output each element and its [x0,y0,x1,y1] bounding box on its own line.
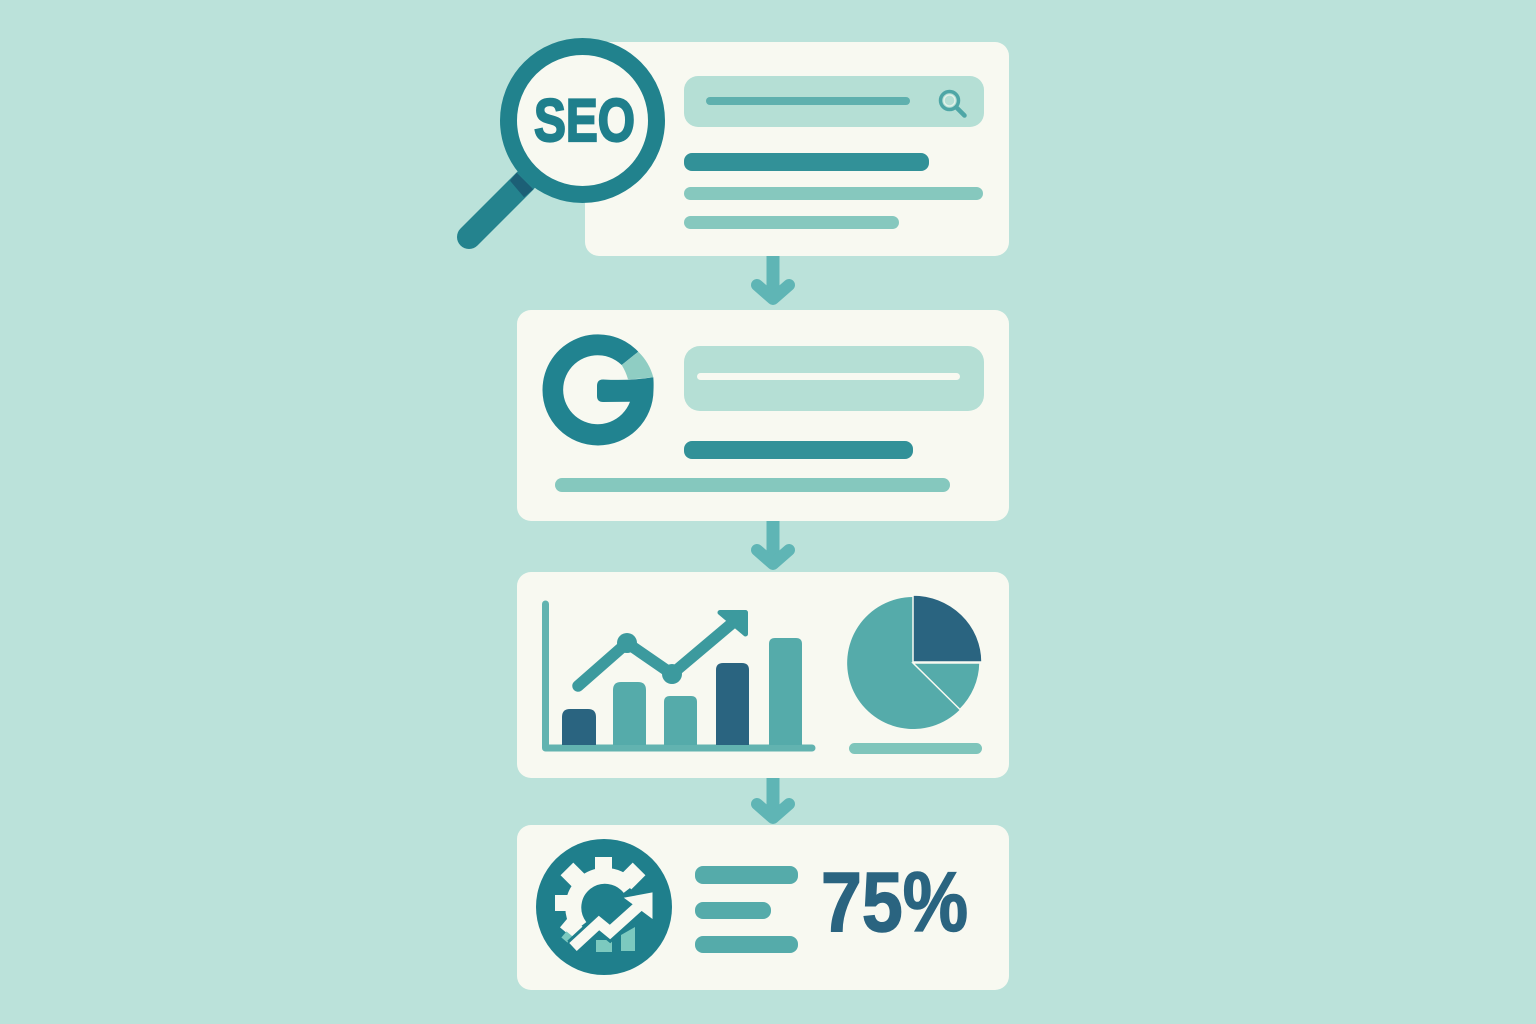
panel: analytics [517,572,1009,778]
arrow: analytics panel to results panel [757,778,789,819]
panel: SEO search result [585,42,1009,256]
result line two [684,216,899,229]
gear [555,857,645,939]
arrow: search panel to analytics panel [757,521,789,565]
arrow: SEO panel to search panel [757,256,789,300]
icon: G logo [542,334,654,446]
icon: SEO magnifying glass [469,46,656,237]
search bar [684,76,984,127]
75 percent figure: 75% [821,855,968,949]
text line bars [695,866,798,953]
bars [562,638,802,745]
growth arrow [573,893,652,947]
bar and line chart [546,604,812,748]
panel: search engine [517,310,1009,521]
icon: small magnifier [940,92,964,116]
trend line with arrow [578,612,746,686]
search box [684,346,984,411]
small bars [596,927,635,952]
result description bar [555,478,950,492]
pie chart [847,595,982,729]
SEO label: SEO [534,87,635,154]
result title bar [684,441,913,459]
small light square [561,931,573,943]
result title bar [684,153,929,171]
panel: results [517,825,1009,990]
pie caption bar [849,743,982,754]
result line one [684,187,983,200]
icon: gear with growth arrow [536,839,672,975]
chart axes [546,604,812,748]
